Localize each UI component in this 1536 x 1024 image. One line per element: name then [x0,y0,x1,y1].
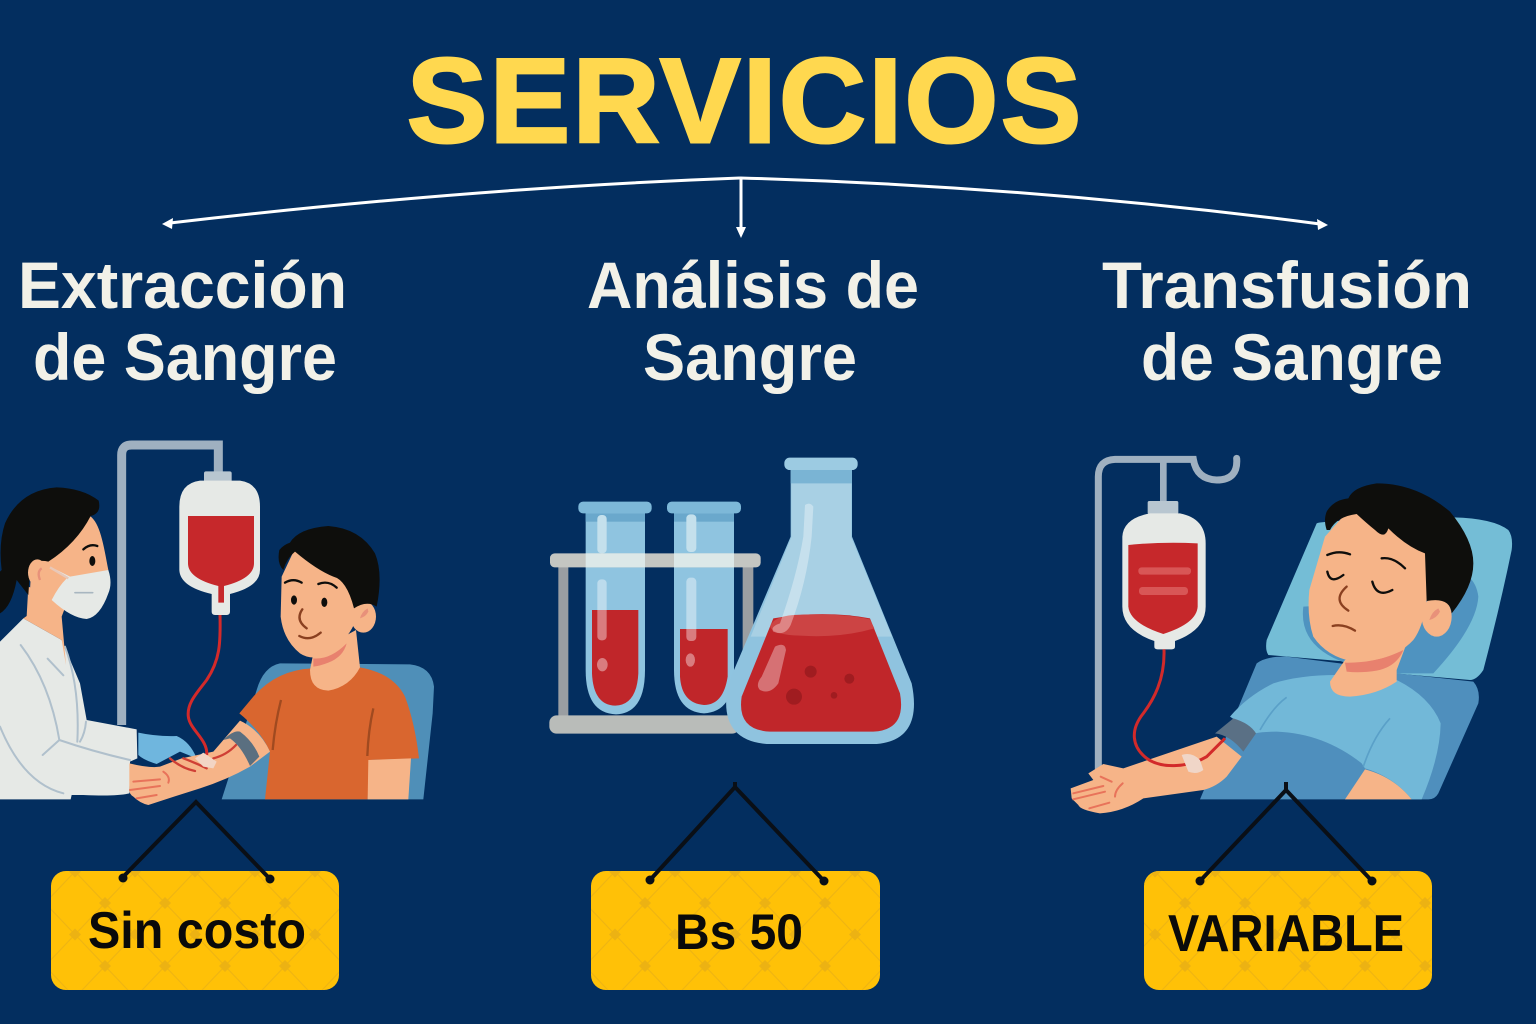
icon: donor patient [239,526,419,799]
heading: Extracción de Sangre: de Sangre [33,320,337,394]
price tag: VARIABLE: VARIABLE [1168,905,1404,963]
icon: glove [138,733,197,764]
arrows: title to three services [162,178,1328,238]
icon: blood tube [188,615,220,755]
icon: bandage [1182,754,1203,773]
icon: patient arm [1071,718,1256,813]
icon: patient arm [129,721,270,805]
heading: Análisis de Sangre: Sangre [643,320,857,394]
price tag: Sin costo [51,802,339,990]
heading: Extracción de Sangre [18,248,347,394]
heading: Transfusión de Sangre [1102,248,1472,394]
icon: flask [726,458,914,744]
price tag: Bs 50: Bs 50 [675,904,803,960]
price tag: Sin costo: Sin costo [88,902,306,960]
illustration: patient receiving transfusion [1071,458,1512,813]
price tag: VARIABLE [1144,782,1432,990]
price tag: Bs 50 [591,782,880,990]
icon: rack [549,565,753,734]
heading: Transfusión de Sangre: de Sangre [1141,320,1443,394]
icon: pillow [1266,517,1512,680]
icon: IV pole [122,445,218,725]
heading: Transfusión de Sangre: Transfusión [1102,248,1472,322]
icon: chair [222,663,434,799]
icon: blood bag [179,471,260,615]
icon: transfusion bag [1122,501,1206,649]
icon: bed [1200,657,1479,799]
heading: Extracción de Sangre: Extracción [18,248,347,322]
icon: rack top rail [550,553,761,567]
heading: Análisis de Sangre: Análisis de [587,248,919,322]
icon: nurse [0,487,137,799]
icon: blood tube [1134,649,1225,766]
icon: test tube two [667,502,741,713]
icon: bandage [195,753,217,768]
illustration: nurse drawing blood from a patient [0,445,434,805]
icon: IV stand with hook [1098,458,1237,768]
heading: Análisis de Sangre [587,248,919,394]
illustration: test tubes and flask [549,458,914,744]
title: SERVICIOS [407,34,1081,168]
icon: patient [1230,483,1473,799]
icon: test tube one [578,502,652,714]
